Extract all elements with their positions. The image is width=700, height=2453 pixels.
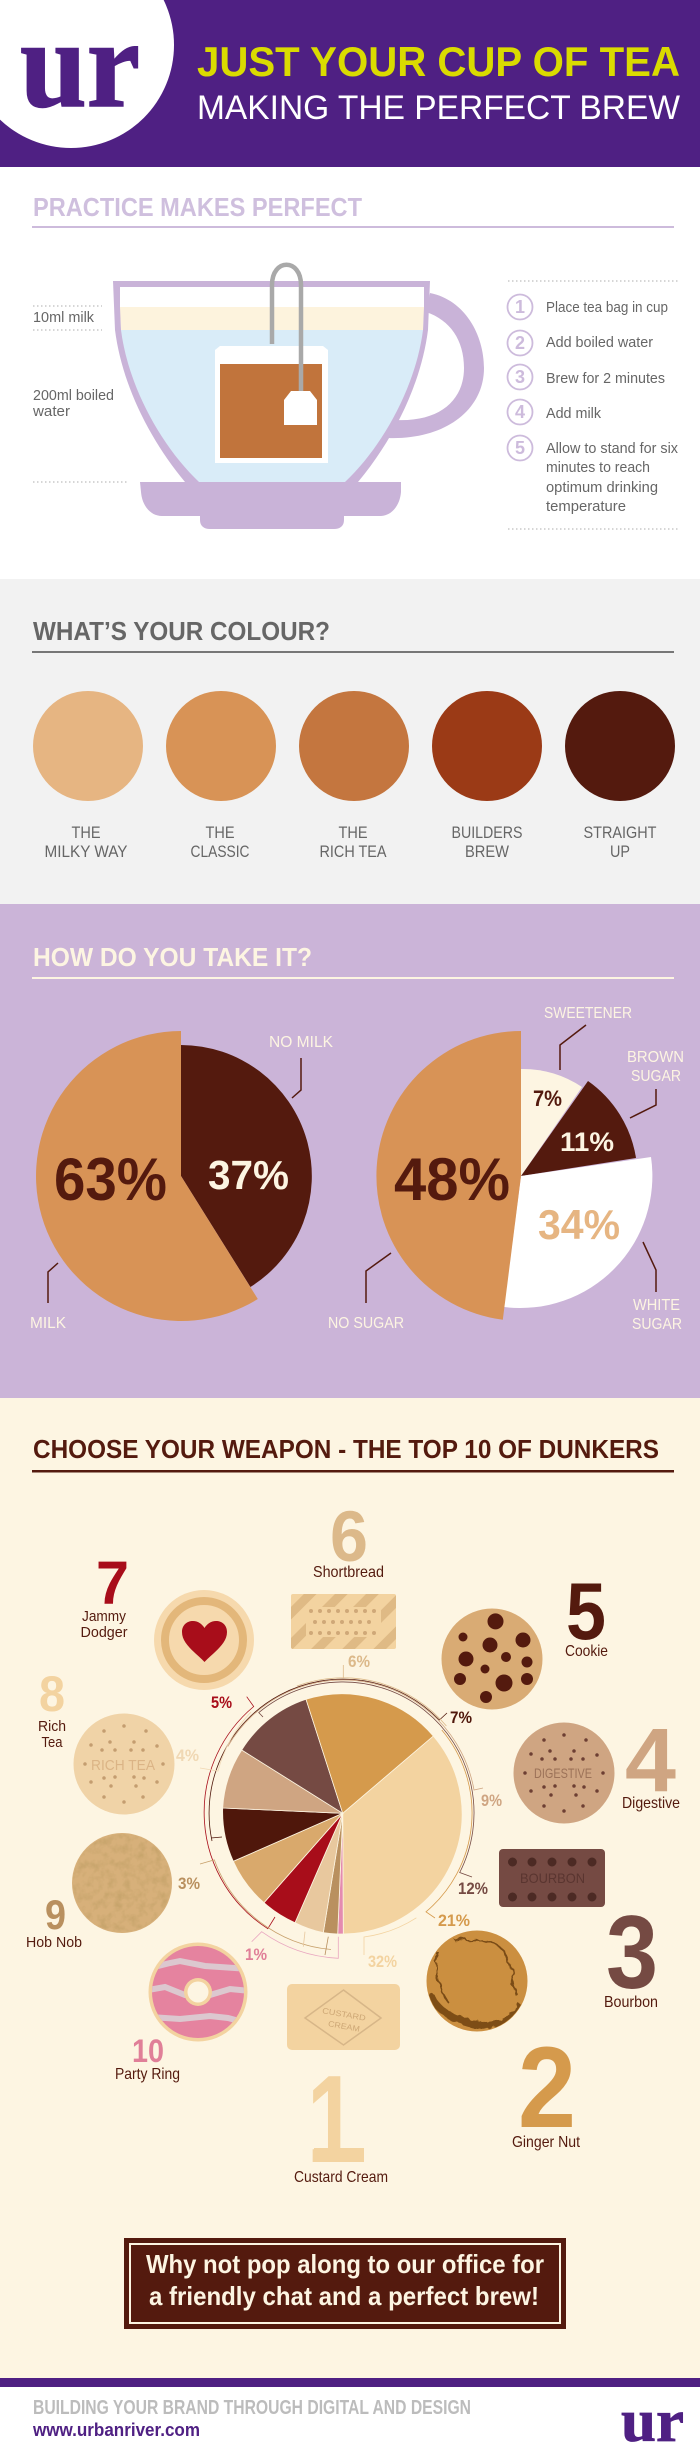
pie chart: sugar: 7% xyxy=(533,1086,562,1111)
rank 2: ginger nut: Ginger Nut xyxy=(512,2134,580,2151)
rank 3: bourbon xyxy=(499,1849,658,2011)
panel: what's your colour xyxy=(0,579,700,904)
website: www.urbanriver.com xyxy=(32,2420,200,2440)
rank 10: party ring: 10 xyxy=(132,2033,164,2069)
label: white sugar: SUGAR xyxy=(632,1316,682,1333)
rank 4: digestive: DIGESTIVE xyxy=(534,1765,592,1781)
rank 1: custard cream: 1 xyxy=(307,2051,357,2189)
rank 8: rich tea: Rich xyxy=(38,1718,66,1735)
step list: 1 xyxy=(515,297,525,317)
rank 1: custard cream: CREAM xyxy=(327,2019,361,2034)
pie chart: sugar xyxy=(376,1031,652,1320)
percentages: 1% xyxy=(245,1945,267,1964)
pie chart: milk xyxy=(36,1031,312,1321)
header banner xyxy=(0,0,700,167)
swatch: the classic: CLASSIC xyxy=(190,843,250,861)
rank 2: ginger nut xyxy=(426,1930,580,2152)
rank 4: digestive: 4 xyxy=(625,1711,676,1811)
rank 7: jammy dodger: Dodger xyxy=(80,1624,128,1641)
label: brown sugar: BROWN xyxy=(627,1049,684,1066)
percentages: 7% xyxy=(450,1708,472,1727)
swatch: the milky way: THE xyxy=(72,824,100,842)
rank 6: shortbread: Shortbread xyxy=(313,1564,384,1581)
heading: WHAT’S YOUR COLOUR? xyxy=(33,616,330,646)
rank 1: custard cream: Custard Cream xyxy=(294,2169,388,2186)
heading: CHOOSE YOUR WEAPON - THE TOP 10 OF DUNKERS xyxy=(33,1434,659,1464)
rank 2: ginger nut: 2 xyxy=(518,2024,576,2152)
swatch: builders brew: BREW xyxy=(465,843,509,861)
callout: 200ml boiled water: water xyxy=(32,404,70,420)
step list: 2 xyxy=(515,333,525,353)
central pie chart xyxy=(223,1694,462,1934)
step list: Place tea bag in cup xyxy=(546,299,668,316)
callout: 200ml boiled water: 200ml boiled xyxy=(33,388,114,404)
percentages: 4% xyxy=(176,1746,199,1765)
rank 8: rich tea xyxy=(38,1666,174,1814)
percentages: 6% xyxy=(348,1652,370,1671)
callout: 200ml boiled water xyxy=(32,388,128,482)
logo badge xyxy=(0,0,174,148)
swatch: straight up xyxy=(565,691,675,861)
call to action box: Why not pop along to our office for xyxy=(146,2249,544,2279)
step list: minutes to reach xyxy=(546,459,650,476)
rank 9: hob nob: Hob Nob xyxy=(26,1934,82,1951)
step list: temperature xyxy=(546,498,626,515)
step list: Allow to stand for six xyxy=(546,440,678,457)
pie chart: sugar: 11% xyxy=(560,1127,614,1157)
label: sweetener: SWEETENER xyxy=(544,1005,632,1022)
step list: optimum drinking xyxy=(546,479,658,496)
title: JUST YOUR CUP OF TEA xyxy=(197,38,680,85)
rank 1: custard cream: CUSTARD xyxy=(321,2006,367,2023)
label: brown sugar: SUGAR xyxy=(631,1068,681,1085)
call to action box: a friendly chat and a perfect brew! xyxy=(149,2281,539,2311)
illustration: tea cup with tea bag xyxy=(113,265,484,529)
pie chart: sugar: 34% xyxy=(538,1201,620,1248)
call to action box xyxy=(124,2238,566,2329)
percentages: 32% xyxy=(368,1952,397,1971)
subtitle: MAKING THE PERFECT BREW xyxy=(197,89,680,127)
logo badge: ur xyxy=(20,0,140,134)
rank 5: cookie: 5 xyxy=(566,1567,606,1657)
panel: how do you take it xyxy=(0,904,700,1398)
swatch: straight up: STRAIGHT xyxy=(584,824,656,842)
step list: Brew for 2 minutes xyxy=(546,370,665,387)
percentages: 21% xyxy=(438,1911,470,1930)
rank 8: rich tea: Tea xyxy=(42,1734,63,1751)
step list: 4 xyxy=(515,402,525,422)
swatch: the classic xyxy=(166,691,276,861)
rank 7: jammy dodger xyxy=(80,1549,254,1690)
rank 8: rich tea: 8 xyxy=(39,1666,65,1722)
rank 9: hob nob xyxy=(26,1830,174,1951)
percentages xyxy=(176,1652,502,1971)
pie chart: sugar: 48% xyxy=(394,1146,510,1213)
callout: 10ml milk xyxy=(33,306,102,330)
rank 10: party ring xyxy=(115,1942,250,2083)
pie chart: milk: 37% xyxy=(208,1152,289,1198)
rank 7: jammy dodger: 7 xyxy=(96,1549,129,1617)
rank 7: jammy dodger: Jammy xyxy=(82,1608,126,1625)
heading: HOW DO YOU TAKE IT? xyxy=(33,942,312,972)
rank 3: bourbon: BOURBON xyxy=(520,1870,585,1886)
rank 5: cookie: Cookie xyxy=(565,1643,608,1660)
pie percentage rings and ticks xyxy=(200,1665,483,1958)
swatch: the milky way xyxy=(33,691,143,861)
swatch: the rich tea xyxy=(299,691,409,861)
tagline: BUILDING YOUR BRAND THROUGH DIGITAL AND DESIGN xyxy=(33,2397,471,2419)
rank 3: bourbon: 3 xyxy=(606,1895,658,2011)
rank 5: cookie xyxy=(442,1567,608,1710)
label: milk xyxy=(30,1263,66,1332)
rank 6: shortbread xyxy=(291,1498,396,1649)
rank 9: hob nob: 9 xyxy=(45,1891,66,1938)
footer xyxy=(0,2378,700,2453)
label: white sugar xyxy=(632,1242,682,1333)
swatch: straight up: UP xyxy=(610,843,630,861)
swatch: the rich tea: THE xyxy=(338,824,368,842)
pie chart: milk: 63% xyxy=(54,1146,167,1213)
label: brown sugar xyxy=(627,1049,684,1118)
rank 4: digestive: Digestive xyxy=(622,1795,680,1812)
label: no sugar xyxy=(328,1253,404,1332)
label: no milk xyxy=(269,1034,333,1098)
panel: choose your weapon xyxy=(0,1398,700,2378)
rank 1: custard cream xyxy=(287,1984,400,2189)
percentages: 12% xyxy=(458,1879,488,1898)
percentages: 3% xyxy=(178,1874,200,1893)
label: white sugar: WHITE xyxy=(633,1297,680,1314)
swatch: the rich tea: RICH TEA xyxy=(320,843,386,861)
swatch: the milky way: MILKY WAY xyxy=(44,843,128,861)
rank 6: shortbread: 6 xyxy=(330,1498,368,1577)
footer logo: ur xyxy=(621,2388,684,2453)
callout: 10ml milk: 10ml milk xyxy=(33,310,95,326)
step list: Add boiled water xyxy=(546,334,653,351)
label: no sugar: NO SUGAR xyxy=(328,1315,404,1332)
step list: 3 xyxy=(515,367,525,387)
step list xyxy=(508,281,678,529)
percentages: 9% xyxy=(481,1791,502,1810)
percentages: 5% xyxy=(211,1693,232,1712)
swatch: the classic: THE xyxy=(206,824,234,842)
label: sweetener xyxy=(544,1005,632,1070)
panel: practice makes perfect xyxy=(0,167,700,579)
swatch: builders brew xyxy=(432,691,542,861)
label: no milk: NO MILK xyxy=(269,1034,333,1051)
swatch: builders brew: BUILDERS xyxy=(452,824,522,842)
heading: PRACTICE MAKES PERFECT xyxy=(33,192,362,222)
label: milk: MILK xyxy=(30,1315,66,1332)
rank 8: rich tea: RICH TEA xyxy=(91,1757,155,1774)
rank 3: bourbon: Bourbon xyxy=(604,1994,658,2011)
step list: 5 xyxy=(515,438,525,458)
rank 4: digestive xyxy=(514,1711,680,1824)
step list: Add milk xyxy=(546,405,601,422)
rank 10: party ring: Party Ring xyxy=(115,2066,180,2083)
